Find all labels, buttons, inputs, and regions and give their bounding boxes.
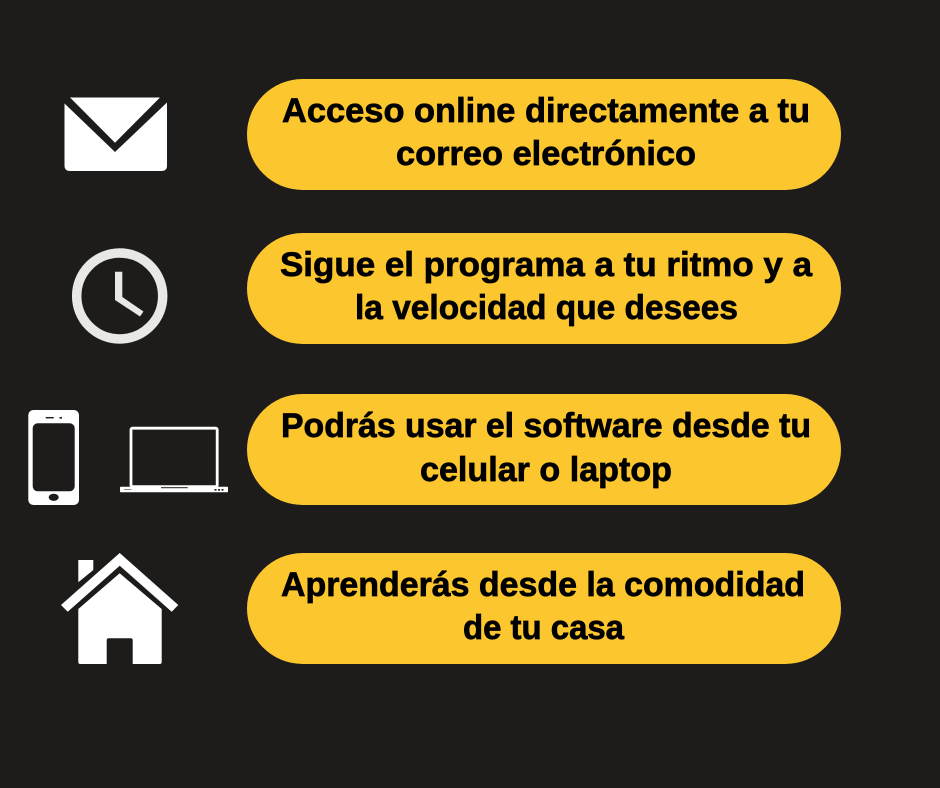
panel: own pace bbox=[247, 233, 841, 344]
panel: devices bbox=[247, 394, 841, 505]
icon: house bbox=[61, 553, 178, 664]
panel: own pace: la velocidad que desees bbox=[355, 289, 738, 327]
panel: devices: celular o laptop bbox=[420, 451, 672, 489]
panel: devices: Podrás usar el software desde tu bbox=[281, 407, 811, 445]
icon: laptop bbox=[120, 428, 228, 492]
panel: online access: Acceso online directamente a tu bbox=[282, 92, 810, 130]
panel: online access: correo electrónico bbox=[396, 135, 696, 173]
icon: smartphone bbox=[28, 410, 79, 505]
panel: own pace: Sigue el programa a tu ritmo y a bbox=[280, 246, 813, 284]
panel: online access bbox=[247, 79, 841, 190]
panel: learn from home: Aprenderás desde la comodidad bbox=[281, 566, 805, 604]
panel: learn from home: de tu casa bbox=[463, 609, 625, 647]
panel: learn from home bbox=[247, 553, 841, 664]
icon: envelope bbox=[64, 98, 167, 171]
icon: clock bbox=[77, 253, 163, 339]
